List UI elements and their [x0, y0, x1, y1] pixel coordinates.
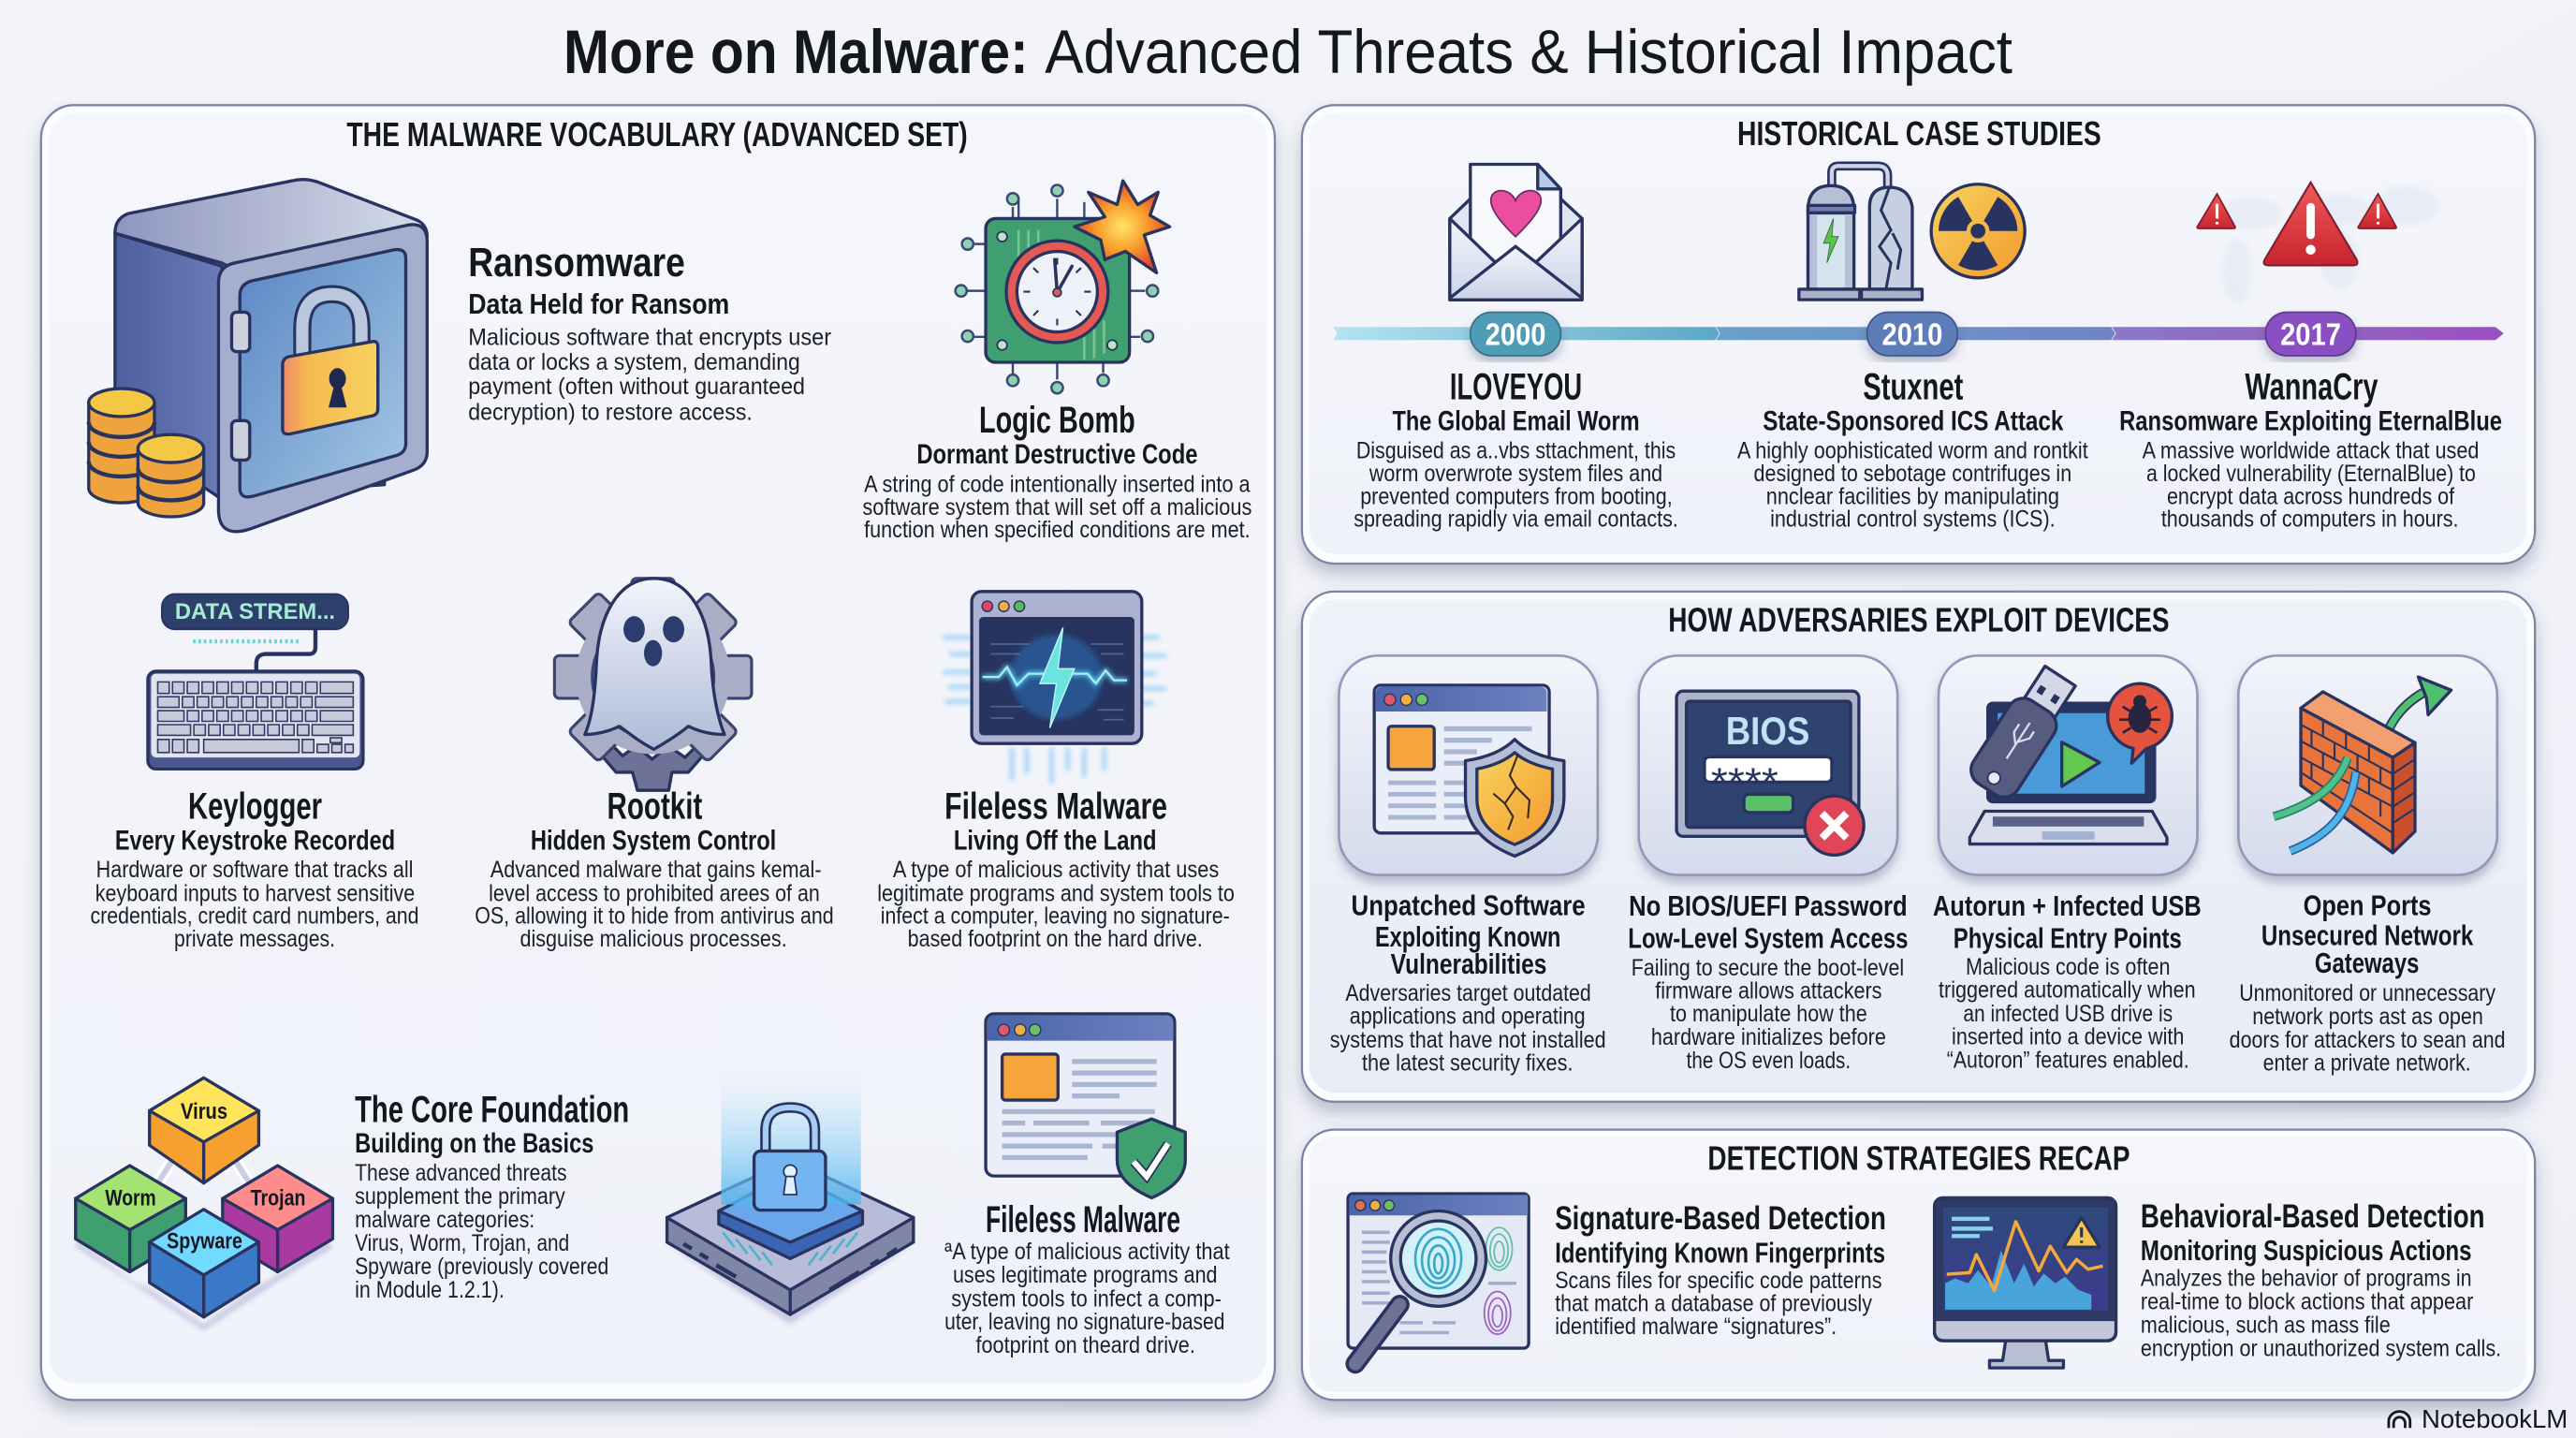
- icon: keylogger: DATA STREM...: [175, 600, 335, 624]
- cube: worm: [76, 1166, 185, 1271]
- keylogger text: private messages.: [174, 927, 335, 952]
- signature detection text: Signature-Based Detection: [1555, 1200, 1886, 1237]
- card: unpatched software text: the latest security fixes.: [1362, 1051, 1573, 1077]
- logic bomb text: Dormant Destructive Code: [916, 439, 1197, 470]
- signature detection text: Scans files for specific code patterns: [1555, 1269, 1881, 1294]
- card: open ports text: doors for attackers to sean and: [2230, 1028, 2506, 1053]
- rootkit text: Rootkit: [607, 786, 702, 828]
- heading: historical: HISTORICAL CASE STUDIES: [1737, 114, 2101, 153]
- icon: logic bomb chip with clock: [956, 181, 1170, 393]
- icon: browser with shield: [986, 1014, 1185, 1197]
- keylogger text: Every Keystroke Recorded: [115, 825, 395, 856]
- fileless malware second text: uter, leaving no signature-based: [944, 1310, 1224, 1335]
- signature detection text: Identifying Known Fingerprints: [1555, 1236, 1885, 1269]
- card: bios icon: [1639, 655, 1897, 875]
- core foundation text: malware categories:: [355, 1208, 534, 1233]
- signature detection text: [1555, 1200, 1886, 1340]
- card: bios icon: ****: [1711, 759, 1778, 803]
- fileless malware second text: uses legitimate programs and: [953, 1263, 1218, 1288]
- fileless malware text: A type of malicious activity that uses: [893, 858, 1219, 883]
- case: stuxnet: [1737, 366, 2088, 533]
- core foundation text: supplement the primary: [355, 1184, 565, 1210]
- fileless malware second text: [944, 1199, 1230, 1358]
- keylogger text: [91, 786, 419, 952]
- icon: malware category cubes: [76, 1078, 333, 1331]
- fileless malware text: infect a computer, leaving no signature-: [881, 904, 1230, 930]
- heading: vocabulary: THE MALWARE VOCABULARY (ADVANCED SET): [346, 115, 968, 154]
- core foundation text: The Core Foundation: [355, 1089, 629, 1130]
- keylogger text: keyboard inputs to harvest sensitive: [95, 882, 415, 907]
- timeline band: [1333, 312, 2504, 356]
- year: 2010: 2010: [1881, 318, 1942, 353]
- behavioral detection text: Behavioral-Based Detection: [2141, 1198, 2485, 1235]
- card: autorun usb icon: [1939, 655, 2197, 875]
- case: iloveyou: worm overwrote system files and: [1368, 462, 1662, 487]
- year: 2000: [1471, 312, 1560, 356]
- cube: trojan: [223, 1166, 332, 1271]
- card: autorun text: Autorun + Infected USB: [1933, 889, 2202, 922]
- card: autorun text: Physical Entry Points: [1954, 922, 2182, 955]
- card: unpatched software text: applications and operating: [1350, 1004, 1586, 1029]
- cube: spyware: Spyware: [167, 1229, 242, 1254]
- behavioral detection text: malicious, such as mass file: [2141, 1313, 2391, 1338]
- card: bios text: hardware initializes before: [1651, 1025, 1886, 1050]
- case: iloveyou: prevented computers from booting,: [1360, 484, 1673, 509]
- card: bios text: the OS even loads.: [1687, 1049, 1851, 1074]
- card: unpatched software text: Exploiting Known: [1375, 920, 1560, 953]
- panel: historical case studies: [1302, 105, 2535, 564]
- behavioral detection text: [2141, 1198, 2501, 1361]
- case: stuxnet: nnclear facilities by manipulating: [1766, 484, 2059, 509]
- case: wannacry: WannaCry: [2245, 366, 2378, 407]
- icon: love letter envelope: [1450, 165, 1582, 300]
- cube: virus: [150, 1078, 258, 1183]
- case: stuxnet: industrial control systems (ICS).: [1770, 507, 2056, 533]
- ransomware text: decryption) to restore access.: [468, 400, 753, 425]
- card: unpatched software text: Unpatched Software: [1352, 888, 1586, 921]
- rootkit text: Advanced malware that gains kemal-: [490, 858, 822, 883]
- panel: detection strategies recap: [1302, 1130, 2535, 1400]
- icon: stuxnet centrifuges and radiation: [1799, 166, 2025, 300]
- ransomware text: [468, 240, 831, 425]
- card: autorun text: inserted into a device with: [1952, 1025, 2184, 1050]
- icon: keylogger: [148, 594, 363, 769]
- core foundation text: in Module 1.2.1).: [355, 1278, 505, 1303]
- cube: spyware: [150, 1210, 258, 1317]
- icon: safe with padlock and coins: [89, 180, 427, 532]
- behavioral detection text: real-time to block actions that appear: [2141, 1289, 2473, 1314]
- fileless malware text: based footprint on the hard drive.: [908, 927, 1203, 952]
- title: Advanced Threats & Historical Impact: [1045, 17, 2012, 86]
- card: bios text: Low-Level System Access: [1628, 922, 1909, 955]
- ransomware text: Data Held for Ransom: [468, 287, 729, 320]
- logic bomb text: [862, 400, 1251, 543]
- card: open ports text: Unmonitored or unnecessary: [2239, 981, 2496, 1006]
- fileless malware second text: Fileless Malware: [986, 1199, 1180, 1240]
- card: unpatched software text: Adversaries target outdated: [1345, 981, 1591, 1006]
- core foundation text: These advanced threats: [355, 1161, 567, 1186]
- case: iloveyou: ILOVEYOU: [1450, 366, 1582, 407]
- fileless malware text: Fileless Malware: [944, 786, 1167, 828]
- card: unpatched software text: systems that have not installed: [1330, 1028, 1606, 1053]
- card: unpatched software text: [1330, 888, 1606, 1077]
- rootkit text: level access to prohibited arees of an: [489, 882, 820, 907]
- case: iloveyou: spreading rapidly via email contacts.: [1354, 507, 1678, 533]
- ransomware text: Malicious software that encrypts user: [468, 326, 831, 351]
- rootkit text: [475, 786, 834, 952]
- case: stuxnet: Stuxnet: [1863, 366, 1963, 407]
- fileless malware text: [877, 786, 1235, 952]
- case: wannacry: a locked vulnerability (EternalBlue) to: [2146, 462, 2476, 487]
- keylogger text: Hardware or software that tracks all: [96, 858, 413, 883]
- case: stuxnet: State-Sponsored ICS Attack: [1763, 405, 2064, 436]
- notebooklm logo: NotebookLM: [2422, 1404, 2568, 1433]
- fileless malware second text: system tools to infect a comp-: [951, 1286, 1222, 1312]
- ransomware text: data or locks a system, demanding: [468, 350, 800, 375]
- year: 2017: [2265, 312, 2356, 356]
- cube: virus: Virus: [181, 1100, 227, 1124]
- card: open ports text: enter a private network.: [2263, 1051, 2471, 1077]
- fileless malware second text: ªA type of malicious activity that: [944, 1240, 1230, 1265]
- card: autorun text: [1933, 889, 2202, 1073]
- icon: fileless lightning window: [943, 592, 1166, 784]
- card: open ports text: network ports ast as open: [2252, 1005, 2483, 1030]
- cube: trojan: Trojan: [251, 1186, 305, 1211]
- year: 2010: [1867, 312, 1957, 356]
- behavioral detection text: encryption or unauthorized system calls.: [2141, 1336, 2501, 1361]
- case: wannacry: thousands of computers in hours.: [2161, 507, 2459, 533]
- card: open ports icon: [2238, 655, 2497, 875]
- card: autorun text: an infected USB drive is: [1963, 1002, 2173, 1027]
- card: bios text: [1628, 889, 1909, 1074]
- card: open ports text: Gateways: [2315, 946, 2419, 979]
- card: open ports text: Unsecured Network: [2261, 919, 2474, 952]
- icon: locked chip: [662, 1077, 918, 1325]
- ransomware text: payment (often without guaranteed: [468, 374, 805, 400]
- card: open ports text: Open Ports: [2304, 889, 2432, 922]
- case: stuxnet: A highly oophisticated worm and rontkit: [1737, 438, 2088, 463]
- core foundation text: Spyware (previously covered: [355, 1255, 608, 1280]
- card: bios text: No BIOS/UEFI Password: [1629, 889, 1908, 922]
- keylogger text: credentials, credit card numbers, and: [91, 904, 419, 930]
- card: bios text: Failing to secure the boot-level: [1632, 956, 1904, 981]
- case: stuxnet: designed to sebotage contrifuges in: [1754, 462, 2071, 487]
- card: bios text: firmware allows attackers: [1655, 978, 1881, 1004]
- logic bomb text: Logic Bomb: [979, 400, 1135, 441]
- year: 2017: 2017: [2280, 318, 2341, 353]
- year: 2000: 2000: [1486, 318, 1546, 353]
- fileless malware text: Living Off the Land: [954, 825, 1157, 856]
- panel: the malware vocabulary: [41, 105, 1275, 1400]
- card: autorun text: Malicious code is often: [1966, 955, 2170, 980]
- case: iloveyou: [1354, 366, 1678, 533]
- cube: worm: Worm: [105, 1187, 156, 1211]
- signature detection text: that match a database of previously: [1555, 1292, 1873, 1317]
- icon: magnifier and fingerprints: [1348, 1194, 1529, 1364]
- case: wannacry: encrypt data across hundreds of: [2167, 484, 2454, 509]
- ransomware text: Ransomware: [468, 240, 685, 286]
- card: autorun text: triggered automatically when: [1939, 977, 2196, 1003]
- rootkit text: OS, allowing it to hide from antivirus and: [475, 904, 834, 930]
- case: iloveyou: The Global Email Worm: [1392, 405, 1640, 436]
- case: wannacry: A massive worldwide attack that used: [2143, 438, 2479, 463]
- signature detection text: identified malware “signatures”.: [1555, 1314, 1837, 1340]
- card: bios icon: BIOS: [1726, 709, 1809, 753]
- logic bomb text: function when specified conditions are met.: [864, 518, 1251, 543]
- icon: behavior monitor: [1935, 1197, 2116, 1368]
- behavioral detection text: Analyzes the behavior of programs in: [2141, 1266, 2472, 1291]
- icon: rootkit ghost in gear: [554, 579, 752, 790]
- fileless malware text: legitimate programs and system tools to: [877, 882, 1235, 907]
- heading: detection: DETECTION STRATEGIES RECAP: [1707, 1138, 2130, 1177]
- logic bomb text: software system that will set off a malicious: [862, 495, 1251, 521]
- behavioral detection text: Monitoring Suspicious Actions: [2141, 1234, 2472, 1267]
- core foundation text: [355, 1089, 629, 1303]
- logic bomb text: A string of code intentionally inserted into a: [864, 473, 1251, 498]
- card: unpatched software icon: [1339, 655, 1598, 875]
- heading: exploit: HOW ADVERSARIES EXPLOIT DEVICES: [1668, 601, 2170, 639]
- title: More on Malware:: [564, 17, 1029, 86]
- card: autorun text: “Autoron” features enabled.: [1947, 1048, 2189, 1073]
- case: wannacry: [2119, 366, 2502, 533]
- card: open ports text: [2230, 889, 2506, 1077]
- fileless malware second text: footprint on theard drive.: [976, 1333, 1195, 1358]
- rootkit text: disguise malicious processes.: [520, 927, 787, 952]
- core foundation text: Virus, Worm, Trojan, and: [355, 1231, 569, 1256]
- title: [564, 17, 2012, 86]
- keylogger text: Keylogger: [188, 786, 322, 828]
- case: iloveyou: Disguised as a..vbs sttachment, this: [1356, 438, 1676, 463]
- core foundation text: Building on the Basics: [355, 1128, 593, 1159]
- card: unpatched software text: Vulnerabilities: [1391, 947, 1546, 980]
- icon: wannacry warning triangles: [2197, 183, 2439, 304]
- card: bios text: to manipulate how the: [1670, 1002, 1867, 1027]
- rootkit text: Hidden System Control: [531, 825, 776, 856]
- panel: how adversaries exploit devices: [1302, 592, 2535, 1102]
